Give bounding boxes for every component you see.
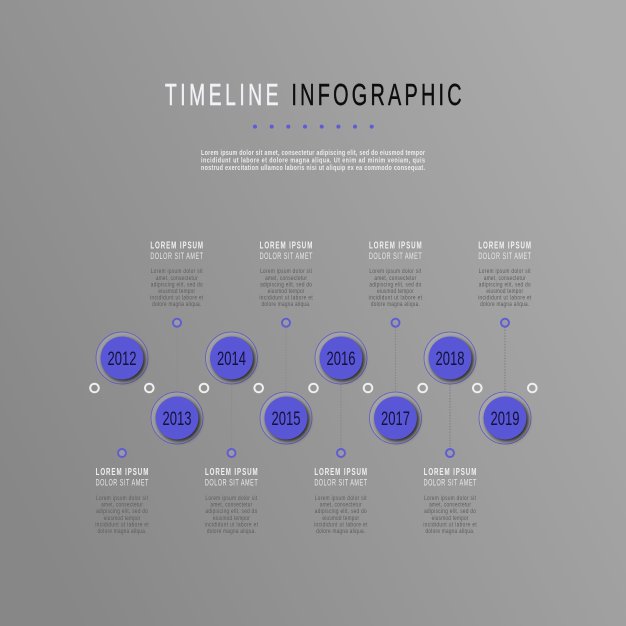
text block: bottom 1: dolore magna aliqua.	[98, 528, 147, 535]
text block: bottom 2	[205, 466, 258, 535]
text block: top 2: DOLOR SIT AMET	[260, 250, 313, 261]
text block: bottom 1: DOLOR SIT AMET	[96, 477, 149, 488]
text block: top 3: LOREM IPSUM	[369, 239, 422, 251]
text block: bottom 2: DOLOR SIT AMET	[205, 477, 258, 488]
text block: top 4: LOREM IPSUM	[478, 239, 531, 251]
text block: bottom 4: amet, consectetur	[429, 502, 471, 509]
text block: bottom 3: incididunt ut labore et	[314, 522, 368, 529]
node 2012	[96, 332, 148, 384]
dots row	[253, 125, 374, 129]
text block: bottom 1: Lorem ipsum dolor sit	[96, 495, 148, 502]
text block: top 1	[150, 239, 204, 308]
text block: top 4: incididunt ut labore et	[478, 295, 532, 302]
node 2013	[151, 392, 203, 444]
text block: top 4: Lorem ipsum dolor sit	[479, 269, 531, 275]
intro text	[201, 149, 425, 172]
text block: bottom 4: adipiscing elit, sed do	[424, 509, 476, 515]
text block: top 1: eiusmod tempor	[158, 288, 195, 295]
text block: top 1: Lorem ipsum dolor sit	[151, 269, 203, 275]
text block: top 4: eiusmod tempor	[486, 288, 523, 295]
text block: bottom 2: amet, consectetur	[210, 502, 252, 509]
text block: top 4: dolore magna aliqua.	[480, 302, 530, 308]
text block: bottom 3: LOREM IPSUM	[314, 466, 367, 478]
text block: top 4: adipiscing elit, sed do	[479, 282, 531, 289]
text block: top 3	[369, 239, 422, 308]
text block: top 3: adipiscing elit, sed do	[369, 282, 421, 289]
text block: bottom 4: LOREM IPSUM	[424, 466, 476, 478]
text block: top 3: DOLOR SIT AMET	[369, 250, 422, 261]
node 2014: 2014	[217, 349, 246, 370]
text block: top 2: LOREM IPSUM	[260, 239, 312, 251]
purple marker rings	[118, 319, 509, 457]
text block: top 2: adipiscing elit, sed do	[260, 282, 312, 289]
text block: bottom 2: LOREM IPSUM	[205, 466, 258, 478]
text block: top 2: Lorem ipsum dolor sit	[260, 269, 312, 275]
text block: bottom 3: eiusmod tempor	[322, 515, 359, 522]
text block: bottom 4: eiusmod tempor	[432, 515, 468, 522]
intro text: nostrud exercitation ullamco laboris nisi ut aliquip ex ea commodo consequat.	[201, 164, 425, 172]
text block: bottom 4: incididunt ut labore et	[423, 522, 477, 529]
text block: top 3: dolore magna aliqua.	[371, 302, 420, 308]
text block: bottom 2: adipiscing elit, sed do	[205, 509, 257, 515]
text block: top 4: DOLOR SIT AMET	[478, 250, 531, 261]
node 2013: 2013	[162, 409, 192, 430]
node 2015: 2015	[272, 409, 300, 430]
text block: top 1: dolore magna aliqua.	[152, 302, 202, 308]
title: INFOGRAPHIC	[291, 76, 462, 112]
text block: top 1: amet, consectetur	[156, 275, 198, 282]
text block: top 3: incididunt ut labore et	[369, 295, 422, 302]
text block: bottom 2: eiusmod tempor	[213, 515, 250, 522]
text block: bottom 1: LOREM IPSUM	[96, 466, 148, 478]
text block: bottom 3: DOLOR SIT AMET	[314, 477, 367, 488]
text block: top 3: eiusmod tempor	[377, 288, 414, 295]
node 2019	[479, 392, 531, 444]
text block: bottom 3: amet, consectetur	[320, 502, 362, 509]
text block: top 2: dolore magna aliqua.	[262, 302, 311, 308]
text block: bottom 4	[423, 466, 477, 535]
text block: bottom 2: Lorem ipsum dolor sit	[205, 495, 258, 502]
text block: top 2: eiusmod tempor	[268, 288, 304, 295]
text block: bottom 1: amet, consectetur	[101, 502, 143, 509]
node 2016	[315, 332, 367, 384]
text block: top 2: incididunt ut labore et	[259, 295, 313, 302]
text block: bottom 4: DOLOR SIT AMET	[424, 477, 477, 488]
text block: bottom 4: Lorem ipsum dolor sit	[424, 495, 476, 502]
text block: top 4	[478, 239, 532, 308]
text block: top 3: Lorem ipsum dolor sit	[369, 269, 422, 275]
text block: top 1: DOLOR SIT AMET	[150, 250, 203, 261]
text block: bottom 1: adipiscing elit, sed do	[96, 509, 148, 515]
text block: bottom 3: dolore magna aliqua.	[316, 528, 366, 535]
node 2012: 2012	[108, 349, 136, 370]
node 2016: 2016	[326, 349, 356, 370]
text block: top 1: LOREM IPSUM	[150, 239, 203, 251]
title: TIMELINE	[165, 79, 278, 112]
text block: bottom 2: dolore magna aliqua.	[207, 528, 256, 535]
intro text: Lorem ipsum dolor sit amet, consectetur adipiscing elit, sed do eiusmod tempor	[201, 149, 425, 157]
text block: top 2	[259, 239, 313, 308]
intro text: incididunt ut labore et dolore magna aliqua. Ut enim ad minim veniam, quis	[201, 157, 425, 165]
text block: top 4: amet, consectetur	[484, 275, 526, 282]
text block: top 2: amet, consectetur	[265, 275, 307, 282]
text block: bottom 4: dolore magna aliqua.	[426, 528, 475, 535]
text block: top 1: adipiscing elit, sed do	[151, 282, 203, 289]
text block: bottom 3: adipiscing elit, sed do	[315, 509, 367, 515]
text block: bottom 1: incididunt ut labore et	[95, 522, 149, 529]
node 2015	[260, 392, 312, 444]
white timeline rings	[90, 384, 537, 392]
node 2018: 2018	[436, 349, 464, 370]
text block: bottom 1	[95, 466, 149, 535]
node 2017	[370, 392, 422, 444]
text block: top 1: incididunt ut labore et	[150, 295, 204, 302]
text block: bottom 1: eiusmod tempor	[104, 515, 140, 522]
text block: top 3: amet, consectetur	[374, 275, 416, 282]
text block: bottom 3: Lorem ipsum dolor sit	[315, 495, 367, 502]
title	[165, 76, 462, 112]
connector lines	[122, 327, 505, 449]
node 2014	[206, 332, 258, 384]
text block: bottom 2: incididunt ut labore et	[205, 522, 258, 529]
node 2017: 2017	[381, 409, 410, 430]
node 2018	[424, 332, 476, 384]
text block: bottom 3	[314, 466, 368, 535]
node 2019: 2019	[490, 409, 520, 430]
